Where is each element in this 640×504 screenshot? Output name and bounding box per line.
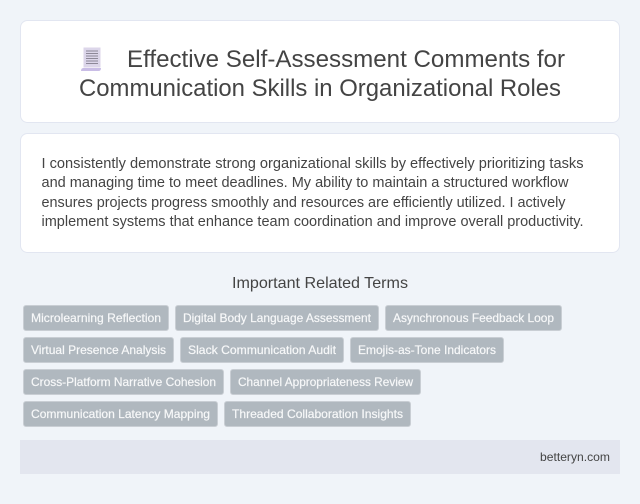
tag: asynchronous feedback loop [386,306,562,330]
tag: digital body language assessment [176,306,378,330]
tag: virtual presence analysis [24,338,174,362]
tag: communication latency mapping [24,402,218,426]
footer bar [20,440,620,474]
heading: important related terms: Important Related Terms [232,275,408,292]
footer site name: betteryn.com [540,450,610,464]
paragraph line 4: implement systems that enhance team coordination and improve overall productivity. [42,214,584,230]
tag: emojis-as-tone indicators: Emojis-as-Tone Indicators [358,343,496,357]
tag: channel appropriateness review: Channel Appropriateness Review [238,375,413,389]
panel: title card [20,20,620,122]
panel: self-assessment paragraph [20,134,620,252]
tag: cross-platform narrative cohesion: Cross-Platform Narrative Cohesion [31,375,216,389]
title line 1: Effective Self-Assessment Comments for [127,46,565,73]
tag: threaded collaboration insights [224,402,410,426]
tag: asynchronous feedback loop: Asynchronous Feedback Loop [393,311,554,325]
icon: document scroll [81,48,101,71]
tag: virtual presence analysis: Virtual Presence Analysis [31,343,166,357]
tag: microlearning reflection [24,306,168,330]
tag: channel appropriateness review [230,370,420,394]
tag group [24,306,562,426]
paragraph line 3: ensures projects progress smoothly and resources are efficiently utilized. I actively [42,195,566,211]
tag: communication latency mapping: Communication Latency Mapping [31,407,210,421]
paragraph line 2: and managing time to meet deadlines. My ability to maintain a structured workflow [42,175,569,191]
tag: emojis-as-tone indicators [350,338,504,362]
paragraph line 1: I consistently demonstrate strong organizational skills by effectively prioritizing tasks [42,156,584,172]
tag: cross-platform narrative cohesion [24,370,224,394]
tag: microlearning reflection: Microlearning Reflection [31,311,161,325]
tag: digital body language assessment: Digital Body Language Assessment [183,311,372,325]
title line 2: Communication Skills in Organizational Roles [79,75,561,102]
tag: slack communication audit: Slack Communication Audit [188,343,337,357]
tag: threaded collaboration insights: Threaded Collaboration Insights [232,407,403,421]
tag: slack communication audit [180,338,344,362]
